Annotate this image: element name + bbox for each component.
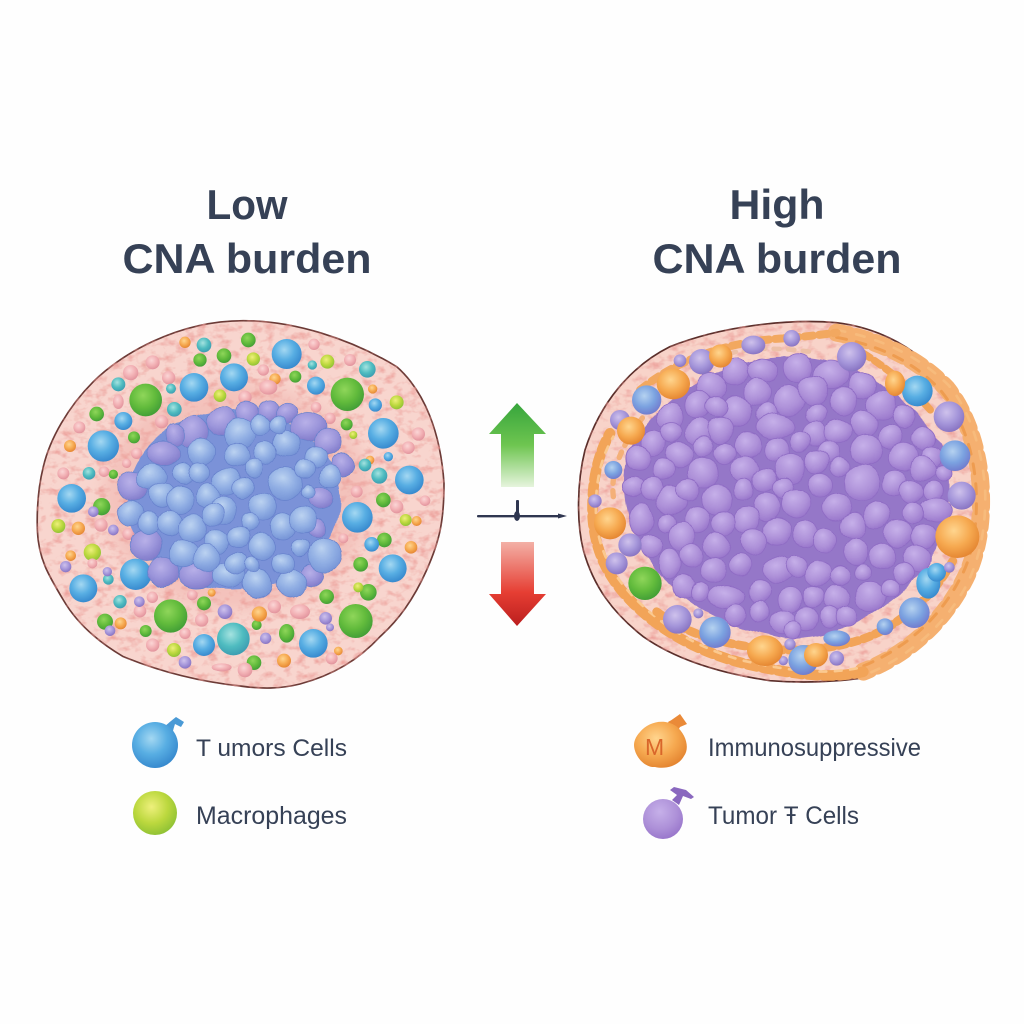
center axis marker	[477, 500, 567, 521]
icon: blue cell	[132, 717, 184, 768]
panel: high CNA burden tissue	[579, 322, 987, 682]
icon: orange cell	[634, 714, 687, 768]
heading: High CNA burden	[652, 181, 902, 282]
heading: Low CNA burden: CNA burden	[122, 235, 372, 282]
arrow: increase (green up)	[489, 403, 546, 487]
legend: tumor cells (blue)	[132, 717, 347, 768]
small stromal cells	[51, 333, 430, 677]
legend: immunosuppressive (orange)	[634, 714, 921, 768]
label: Immunosuppressive	[708, 734, 921, 762]
legend: tumor T cells (purple)	[643, 787, 859, 839]
heading: Low CNA burden: Low	[206, 181, 288, 228]
icon: orange cell: M	[645, 734, 664, 760]
panel: low CNA burden tissue	[37, 321, 444, 688]
heading: Low CNA burden	[122, 181, 372, 282]
tumor cells: large blue	[57, 339, 424, 658]
tissue outline	[37, 321, 444, 688]
arrow: decrease (red down)	[489, 542, 546, 626]
icon: purple cell	[643, 787, 694, 839]
label: Tumor Ŧ Cells	[708, 802, 859, 830]
tissue outline	[579, 322, 987, 682]
peripheral blue and violet tumor cells	[588, 330, 976, 675]
icon: green cell	[133, 791, 177, 835]
mixed teal cell	[217, 623, 250, 655]
orange stromal ring	[593, 330, 985, 675]
heading: High CNA burden: High	[730, 181, 824, 228]
immunosuppressive orange cells	[594, 344, 979, 667]
heading: High CNA burden: CNA burden	[652, 235, 902, 282]
tumor core: blue cell mass	[117, 399, 355, 599]
label: T umors Cells	[196, 735, 347, 762]
macrophages: large green	[129, 378, 373, 638]
tumor core: purple cell mass	[623, 354, 953, 639]
legend: macrophages (green)	[133, 791, 347, 835]
mixed green macrophage	[628, 567, 662, 600]
label: Macrophages	[196, 802, 347, 830]
halo around tumor core	[103, 383, 370, 610]
